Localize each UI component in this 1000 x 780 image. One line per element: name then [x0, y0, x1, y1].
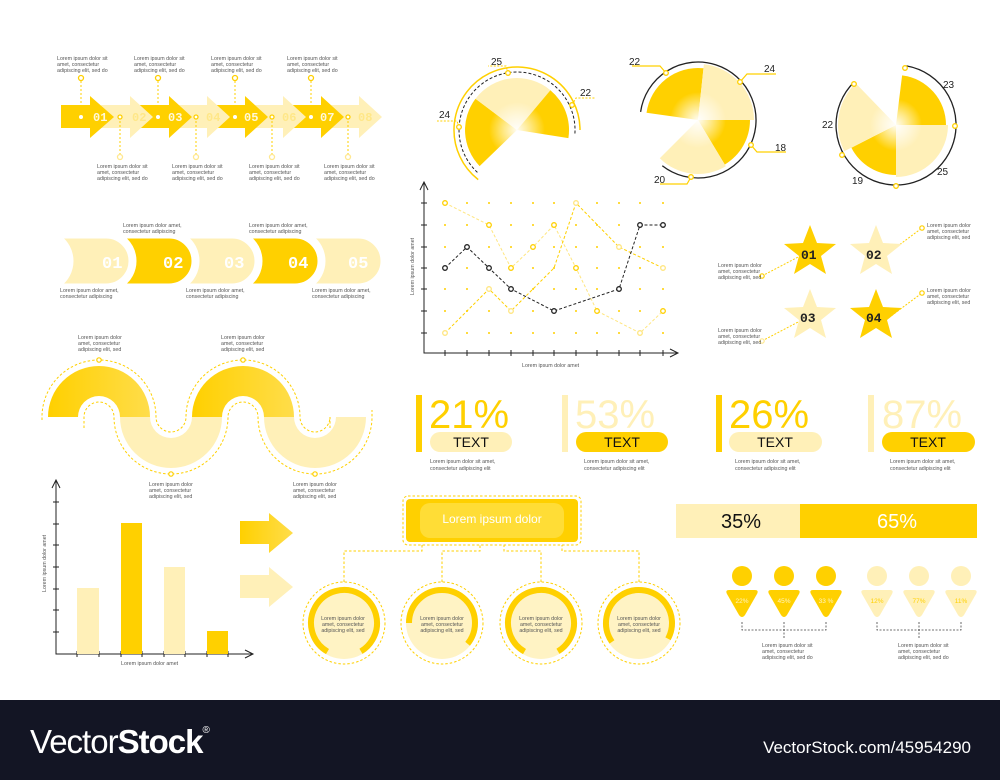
chart: pie 1: 24 [439, 110, 451, 121]
arrow captions: Lorem ipsum dolor sit [249, 164, 300, 170]
panel: stars: adipiscing elit, sed [718, 340, 761, 346]
panel: wave timeline: amet, consectetur [221, 341, 263, 347]
panel: wave timeline: Lorem ipsum dolor [293, 482, 337, 488]
arrow captions: Lorem ipsum dolor sit [134, 56, 185, 62]
panel: tab steps: consectetur adipiscing [60, 294, 112, 300]
panel: stars: 03 [800, 311, 816, 326]
panel: stars: amet, consectetur [927, 294, 969, 300]
panel: stars: amet, consectetur [718, 269, 760, 275]
arrow captions: Lorem ipsum dolor sit [57, 56, 108, 62]
panel: people: 12% [870, 598, 884, 605]
panel: percentage stats: 87% [882, 393, 962, 437]
footer [0, 700, 1000, 780]
arrow captions: adipiscing elit, sed do [134, 68, 185, 74]
panel: people: Lorem ipsum dolor sit [898, 643, 949, 649]
panel: org chart: Lorem ipsum dolor [617, 616, 661, 622]
panel: percentage stats: TEXT [604, 434, 640, 450]
arrows [61, 96, 382, 138]
arrow numbers [93, 111, 372, 125]
arrow numbers: 05 [244, 111, 258, 125]
panel: tab steps: consectetur adipiscing [249, 229, 301, 235]
chart: pie 1 [437, 57, 595, 180]
panel: percentage stats: TEXT [910, 434, 946, 450]
panel: wave timeline [42, 335, 372, 500]
panel: org chart: amet, consectetur [421, 622, 463, 628]
panel: people: amet, consectetur [898, 649, 940, 655]
panel: tab steps: Lorem ipsum dolor amet, [186, 288, 245, 294]
panel: wave timeline: Lorem ipsum dolor [78, 335, 122, 341]
panel: tab steps: Lorem ipsum dolor amet, [60, 288, 119, 294]
panel: org chart: Lorem ipsum dolor [420, 616, 464, 622]
chart: bar chart [42, 480, 253, 667]
arrow numbers: 08 [358, 111, 372, 125]
panel: tab steps: consectetur adipiscing [186, 294, 238, 300]
panel: people [726, 566, 977, 661]
panel: people: 45% [777, 598, 791, 605]
chart: split bar 35/65 [676, 504, 977, 538]
arrow captions: amet, consectetur [134, 62, 176, 68]
arrow captions: Lorem ipsum dolor sit [324, 164, 375, 170]
panel: org chart: adipiscing elit, sed [321, 628, 365, 634]
chart: pie 3: 22 [822, 120, 834, 131]
panel: percentage stats: TEXT [453, 434, 489, 450]
panel: tab steps: 01 [102, 255, 122, 274]
panel: stars: 02 [866, 248, 882, 263]
panel: people: amet, consectetur [762, 649, 804, 655]
arrow captions: adipiscing elit, sed do [287, 68, 338, 74]
panel: stars: 01 [801, 248, 817, 263]
chart: split bar 35/65: 65% [877, 511, 917, 533]
footer: VectorStock.com/45954290 [763, 738, 971, 757]
panel: stars: adipiscing elit, sed [718, 275, 761, 281]
panel: tab steps: consectetur adipiscing [312, 294, 364, 300]
panel: stars: Lorem ipsum dolor [927, 223, 971, 229]
chart: pie 2: 20 [654, 175, 666, 186]
panel: arrow timeline [57, 56, 382, 182]
arrow captions: Lorem ipsum dolor sit [211, 56, 262, 62]
panel: org chart: Lorem ipsum dolor [442, 512, 542, 526]
panel: stars: amet, consectetur [718, 334, 760, 340]
panel: percentage stats: Lorem ipsum dolor sit amet, [890, 459, 955, 465]
arrow captions: amet, consectetur [287, 62, 329, 68]
panel: org chart: adipiscing elit, sed [519, 628, 563, 634]
arrow captions: Lorem ipsum dolor sit [172, 164, 223, 170]
arrow numbers: 07 [320, 111, 334, 125]
panel: tab steps: Lorem ipsum dolor amet, [249, 223, 308, 229]
arrow numbers: 06 [282, 111, 296, 125]
chart: pie 2: 22 [629, 57, 641, 68]
panel: tab steps [60, 223, 382, 300]
connectors [81, 81, 348, 155]
panel: percentage stats: 53% [575, 393, 655, 437]
panel: tab steps: 03 [224, 255, 244, 274]
panel: stars: adipiscing elit, sed [927, 300, 970, 306]
chart: bar chart: Lorem ipsum dolor amet [42, 534, 48, 592]
panel: people: adipiscing elit, sed do [898, 655, 949, 661]
panel: org chart: Lorem ipsum dolor [321, 616, 365, 622]
panel: org chart: amet, consectetur [520, 622, 562, 628]
footer: ® [202, 725, 210, 736]
panel: stars: 04 [866, 311, 882, 326]
panel: percentage stats: 26% [729, 393, 809, 437]
arrow captions: amet, consectetur [97, 170, 139, 176]
chart: pie 2: 18 [775, 143, 787, 154]
panel: people: adipiscing elit, sed do [762, 655, 813, 661]
arrow captions: amet, consectetur [324, 170, 366, 176]
chart: pie 1: 22 [580, 88, 592, 99]
panel: tab steps: consectetur adipiscing [123, 229, 175, 235]
chart: pie 1: 25 [491, 57, 503, 68]
panel: wave timeline: amet, consectetur [149, 488, 191, 494]
panel: wave timeline: amet, consectetur [78, 341, 120, 347]
chart: pie 2 [629, 57, 787, 186]
panel: percentage stats: consectetur adipiscing elit [584, 466, 645, 472]
arrow numbers: 02 [132, 111, 146, 125]
chart: line chart: Lorem ipsum dolor amet [522, 363, 580, 369]
panel: tab steps: 04 [288, 255, 308, 274]
panel: stars: amet, consectetur [927, 229, 969, 235]
arrow numbers: 01 [93, 111, 107, 125]
panel: percentage stats: Lorem ipsum dolor sit amet, [430, 459, 495, 465]
arrow numbers: 04 [206, 111, 220, 125]
chart: pie 3: 19 [852, 176, 864, 187]
panel: org chart: adipiscing elit, sed [617, 628, 661, 634]
panel: percentage stats: 21% [429, 393, 509, 437]
arrow captions: Lorem ipsum dolor sit [287, 56, 338, 62]
panel: stars: Lorem ipsum dolor [718, 328, 762, 334]
panel: wave timeline: adipiscing elit, sed [78, 347, 121, 353]
arrow captions: adipiscing elit, sed do [57, 68, 108, 74]
panel: wave timeline: adipiscing elit, sed [149, 494, 192, 500]
panel: percentage stats: consectetur adipiscing elit [430, 466, 491, 472]
chart: line chart: Lorem ipsum dolor amet [410, 237, 416, 295]
panel: stars: adipiscing elit, sed [927, 235, 970, 241]
panel: people: 33 % [819, 598, 834, 605]
arrow captions: adipiscing elit, sed do [97, 176, 148, 182]
panel: org chart: amet, consectetur [322, 622, 364, 628]
arrow captions: amet, consectetur [211, 62, 253, 68]
arrow captions: amet, consectetur [249, 170, 291, 176]
panel: percentage stats: TEXT [757, 434, 793, 450]
arrow captions: Lorem ipsum dolor sit [97, 164, 148, 170]
chart: pie 3 [822, 66, 957, 188]
panel: people: 77% [912, 598, 926, 605]
chart: split bar 35/65: 35% [721, 511, 761, 533]
arrow captions: adipiscing elit, sed do [172, 176, 223, 182]
panel: tab steps: 02 [163, 255, 183, 274]
panel: wave timeline: Lorem ipsum dolor [221, 335, 265, 341]
panel: percentage stats: consectetur adipiscing elit [735, 466, 796, 472]
grid dots [444, 202, 664, 334]
arrow captions: amet, consectetur [57, 62, 99, 68]
panel: org chart: amet, consectetur [618, 622, 660, 628]
panel: org chart [299, 496, 685, 669]
axes [420, 182, 678, 357]
arrow captions: adipiscing elit, sed do [249, 176, 300, 182]
arrow captions: adipiscing elit, sed do [211, 68, 262, 74]
panel: tab steps: Lorem ipsum dolor amet, [312, 288, 371, 294]
panel: wave timeline: Lorem ipsum dolor [149, 482, 193, 488]
chart: pie 2: 24 [764, 64, 776, 75]
arrow captions: amet, consectetur [172, 170, 214, 176]
panel: percentage stats: Lorem ipsum dolor sit amet, [735, 459, 800, 465]
series [445, 203, 663, 333]
arrow captions [57, 56, 375, 182]
panel: tab steps: 05 [348, 255, 368, 274]
panel: stars: Lorem ipsum dolor [927, 288, 971, 294]
panel: wave timeline: adipiscing elit, sed [293, 494, 336, 500]
panel: wave timeline: adipiscing elit, sed [221, 347, 264, 353]
chart: line chart [410, 182, 678, 369]
chart: pie 3: 25 [937, 167, 949, 178]
panel: org chart: adipiscing elit, sed [420, 628, 464, 634]
chart: bar chart: Lorem ipsum dolor amet [121, 661, 179, 667]
arrow captions: adipiscing elit, sed do [324, 176, 375, 182]
panel: org chart: Lorem ipsum dolor [519, 616, 563, 622]
panel: stars [718, 223, 971, 346]
footer: VectorStock [30, 723, 202, 760]
panel: tab steps: Lorem ipsum dolor amet, [123, 223, 182, 229]
chart: pie 3: 23 [943, 80, 955, 91]
icon: arrows [240, 513, 293, 607]
panel: percentage stats: Lorem ipsum dolor sit amet, [584, 459, 649, 465]
panel: percentage stats [416, 393, 975, 472]
arrow numbers: 03 [168, 111, 182, 125]
panel: people: 22% [735, 598, 749, 605]
panel: people: 11% [955, 598, 967, 605]
panel: people: Lorem ipsum dolor sit [762, 643, 813, 649]
panel: percentage stats: consectetur adipiscing elit [890, 466, 951, 472]
panel: stars: Lorem ipsum dolor [718, 263, 762, 269]
panel: wave timeline: amet, consectetur [293, 488, 335, 494]
